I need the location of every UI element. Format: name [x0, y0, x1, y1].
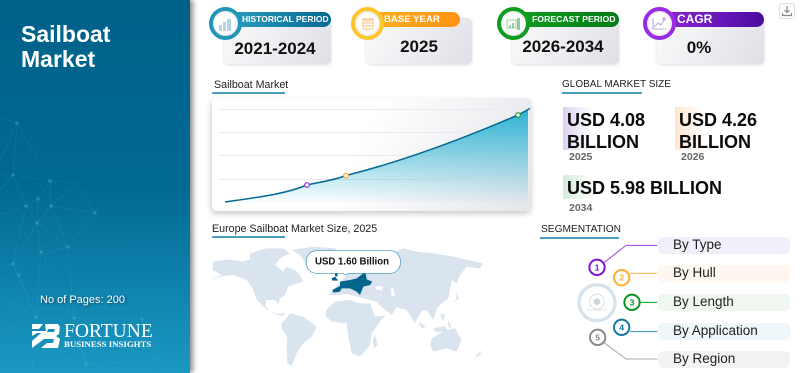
callout: Europe value — [306, 251, 400, 275]
area under curve — [225, 109, 528, 202]
icon: bar chart — [209, 7, 242, 40]
card label: FORECAST PERIOD — [532, 14, 616, 24]
central radar icon — [579, 285, 615, 321]
node 5 — [590, 330, 605, 345]
line chart panel — [212, 98, 532, 211]
node 3: 3 — [630, 297, 635, 307]
node 3 — [624, 295, 640, 310]
segment: by length: By Length — [673, 294, 734, 309]
icon: calendar — [351, 7, 384, 40]
year: 2026 — [681, 151, 704, 163]
heading: Sailboat Market: Sailboat Market — [214, 79, 288, 91]
card label: CAGR — [677, 12, 712, 26]
card: CAGR — [643, 7, 765, 66]
node 1 — [589, 260, 605, 275]
logo: Fortune Business Insights — [32, 321, 153, 349]
sidebar title: Market — [21, 46, 95, 72]
logo wordmark top: FORTUNE — [64, 321, 153, 342]
card label — [230, 12, 331, 27]
segment: by type — [658, 237, 790, 254]
heading: global market size: GLOBAL MARKET SIZE — [562, 79, 671, 90]
node 1: 1 — [595, 262, 600, 272]
growth curve — [225, 108, 530, 202]
value — [567, 110, 645, 152]
node 5: 5 — [595, 332, 600, 342]
segment: by hull: By Hull — [673, 265, 716, 280]
sidebar title: Sailboat — [21, 21, 110, 47]
card label: HISTORICAL PERIOD — [242, 14, 329, 24]
card body — [366, 18, 472, 64]
value: USD 5.98 BILLION — [567, 178, 722, 198]
card: forecast period — [497, 7, 620, 66]
node 2 — [614, 270, 629, 285]
data point: forecast — [516, 113, 520, 117]
callout: Europe value: USD 1.60 Billion — [315, 257, 389, 268]
logo wordmark bottom: BUSINESS INSIGHTS — [64, 339, 151, 349]
card label — [370, 12, 460, 27]
card: historical period — [209, 7, 332, 66]
stat: 2034 market size — [563, 175, 722, 214]
stat: 2025 market size — [563, 107, 645, 163]
Europe highlight — [331, 273, 372, 295]
card value: 2021-2024 — [234, 39, 316, 58]
page count: No of Pages: 200 — [40, 294, 125, 306]
node 4: 4 — [619, 322, 624, 332]
card label — [662, 12, 764, 27]
icon: download button — [779, 3, 795, 19]
card body — [224, 18, 331, 64]
node 4 — [614, 320, 629, 335]
year: 2025 — [569, 151, 592, 163]
card body — [512, 18, 619, 64]
highlight swatch — [563, 107, 593, 150]
segment: by region — [658, 351, 790, 368]
value: BILLION — [567, 132, 639, 152]
card label: BASE YEAR — [384, 14, 440, 25]
logo mark — [32, 324, 60, 348]
sidebar title — [21, 21, 110, 72]
node 2: 2 — [619, 273, 624, 283]
data point: base — [305, 183, 309, 187]
world map — [212, 246, 483, 366]
landmasses — [210, 247, 483, 366]
decorative network pattern — [0, 117, 160, 373]
icon: forecast chart — [497, 7, 530, 40]
card label — [517, 12, 619, 27]
card value: 2026-2034 — [522, 37, 604, 56]
value: USD 4.26 — [679, 110, 757, 130]
segment: by type: By Type — [673, 237, 722, 252]
segmentation diagram — [577, 244, 658, 360]
value — [679, 110, 757, 152]
highlight swatch — [675, 107, 705, 150]
left sidebar panel — [0, 0, 190, 373]
value: BILLION — [679, 132, 751, 152]
card body — [657, 18, 764, 64]
year: 2034 — [569, 202, 592, 214]
segment: by application — [658, 323, 790, 340]
icon: growth chart — [643, 7, 676, 40]
stat: 2026 market size — [675, 107, 757, 163]
card value: 0% — [687, 38, 711, 57]
highlight swatch — [563, 175, 593, 199]
heading: segmentation: SEGMENTATION — [541, 224, 621, 235]
inland seas — [375, 286, 395, 296]
segment: by length — [658, 294, 790, 311]
card: base year — [351, 7, 473, 66]
heading: Europe market size: Europe Sailboat Market Size, 2025 — [212, 223, 377, 235]
segment: by application: By Application — [673, 323, 758, 338]
segment: by region: By Region — [673, 351, 735, 366]
value: USD 4.08 — [567, 110, 645, 130]
connectors — [604, 245, 657, 359]
data point: mid — [344, 173, 348, 178]
card value: 2025 — [400, 37, 438, 56]
segment: by hull — [658, 265, 790, 282]
